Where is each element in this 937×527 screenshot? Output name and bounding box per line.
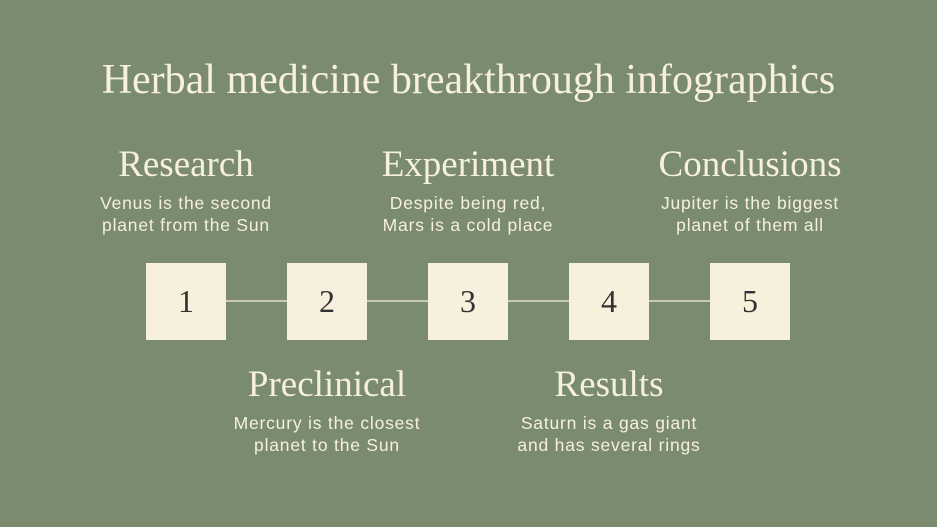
step: results xyxy=(517,364,701,455)
connector line xyxy=(186,300,750,302)
title: Herbal medicine breakthrough infographics xyxy=(102,57,835,103)
step: results: and has several rings xyxy=(517,435,701,455)
step: results: Saturn is a gas giant xyxy=(521,413,697,433)
step: research xyxy=(100,144,272,235)
step: preclinical xyxy=(234,364,420,455)
box 4: 4 xyxy=(601,283,617,319)
step: preclinical: Preclinical xyxy=(248,364,406,405)
box 3: 3 xyxy=(460,283,476,319)
step: preclinical: Mercury is the closest xyxy=(234,413,420,433)
box 5 xyxy=(710,263,790,340)
step: conclusions: Jupiter is the biggest xyxy=(661,193,839,213)
box 1 xyxy=(146,263,226,340)
step: conclusions: Conclusions xyxy=(659,144,841,185)
box 2: 2 xyxy=(319,283,335,319)
box 1: 1 xyxy=(178,283,194,319)
step: preclinical: planet to the Sun xyxy=(254,435,400,455)
box 2 xyxy=(287,263,367,340)
step: experiment xyxy=(382,144,554,235)
box 5: 5 xyxy=(742,283,758,319)
step: conclusions xyxy=(659,144,841,235)
step: conclusions: planet of them all xyxy=(676,215,824,235)
step: experiment: Mars is a cold place xyxy=(383,215,553,235)
step: experiment: Experiment xyxy=(382,144,554,185)
step: experiment: Despite being red, xyxy=(390,193,546,213)
step: research: Research xyxy=(118,144,254,185)
box 4 xyxy=(569,263,649,340)
step: research: planet from the Sun xyxy=(102,215,270,235)
box 3 xyxy=(428,263,508,340)
step: research: Venus is the second xyxy=(100,193,272,213)
step: results: Results xyxy=(555,364,663,405)
